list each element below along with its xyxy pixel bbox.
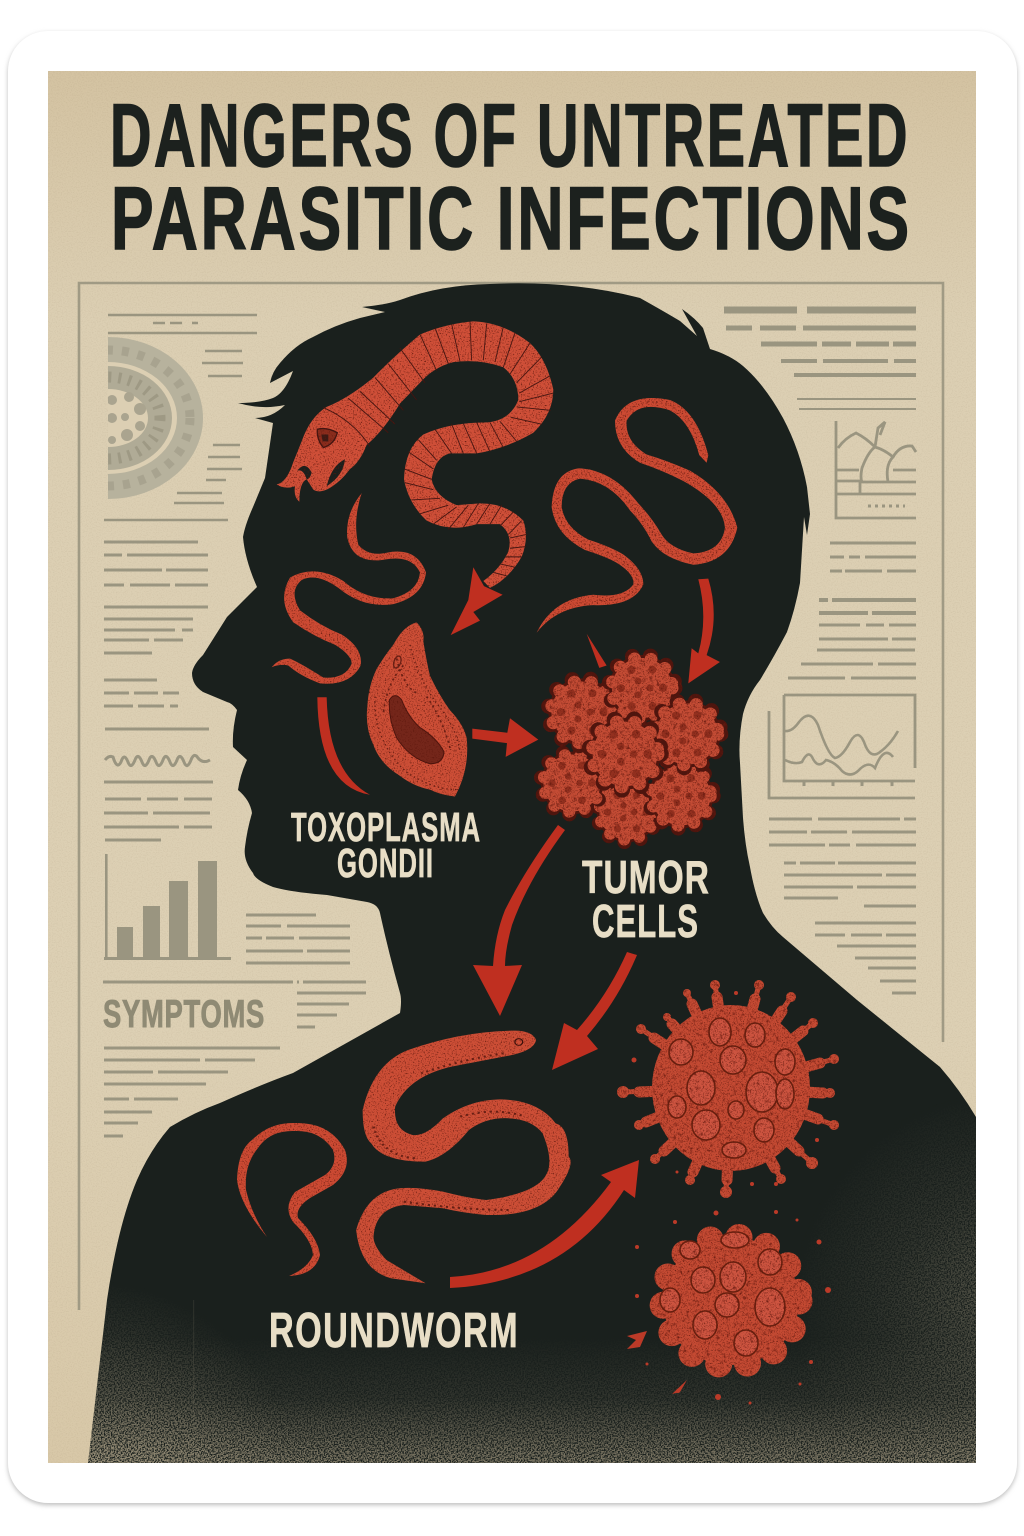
icon: cross-section diagram [108,337,203,499]
curved stroke under worm [317,697,370,795]
segmented parasite worm [277,321,553,588]
arrow: roundworm to tumor [450,1160,639,1288]
label: tumor cells: CELLS [592,895,699,947]
label: roundworm: ROUNDWORM [269,1304,519,1358]
heading: symptoms: SYMPTOMS [103,993,265,1036]
chart: hand drawn diagram [836,421,916,518]
tick mark near tumor [587,634,607,668]
bar chart [104,854,231,960]
toxoplasma gondii cell [367,622,467,797]
solid tumor [660,1232,799,1365]
chart: line graph box [769,695,915,798]
virus-like tumor cell [617,980,839,1198]
panel: right newspaper column text [724,310,916,993]
newspaper frame [79,283,943,1310]
thin worm right [537,398,737,633]
panel: left newspaper column text [103,315,366,1136]
thin worm group left [272,493,426,684]
label: tumor cells: TUMOR [582,851,710,903]
arrow: worm to toxoplasma [451,567,503,635]
arrow: tumor cells to roundworm [552,952,637,1070]
splatter droplets [627,991,831,1404]
wave sketch [105,755,210,766]
roundworm small [237,1123,347,1276]
roundworm large [356,1031,571,1283]
title [110,85,912,268]
label: toxoplasma gondii [291,804,481,886]
arrow: tumor to roundworm [473,825,565,1016]
tumor cell cluster [541,655,721,842]
label: toxoplasma gondii: GONDII [337,840,434,886]
label: tumor cells [582,851,710,947]
arrow: worm to tumor [688,579,720,683]
human head and shoulders silhouette [48,270,976,1470]
label: toxoplasma gondii: TOXOPLASMA [291,804,481,850]
arrow: toxoplasma to tumor [472,718,538,757]
arrows [317,567,720,1288]
